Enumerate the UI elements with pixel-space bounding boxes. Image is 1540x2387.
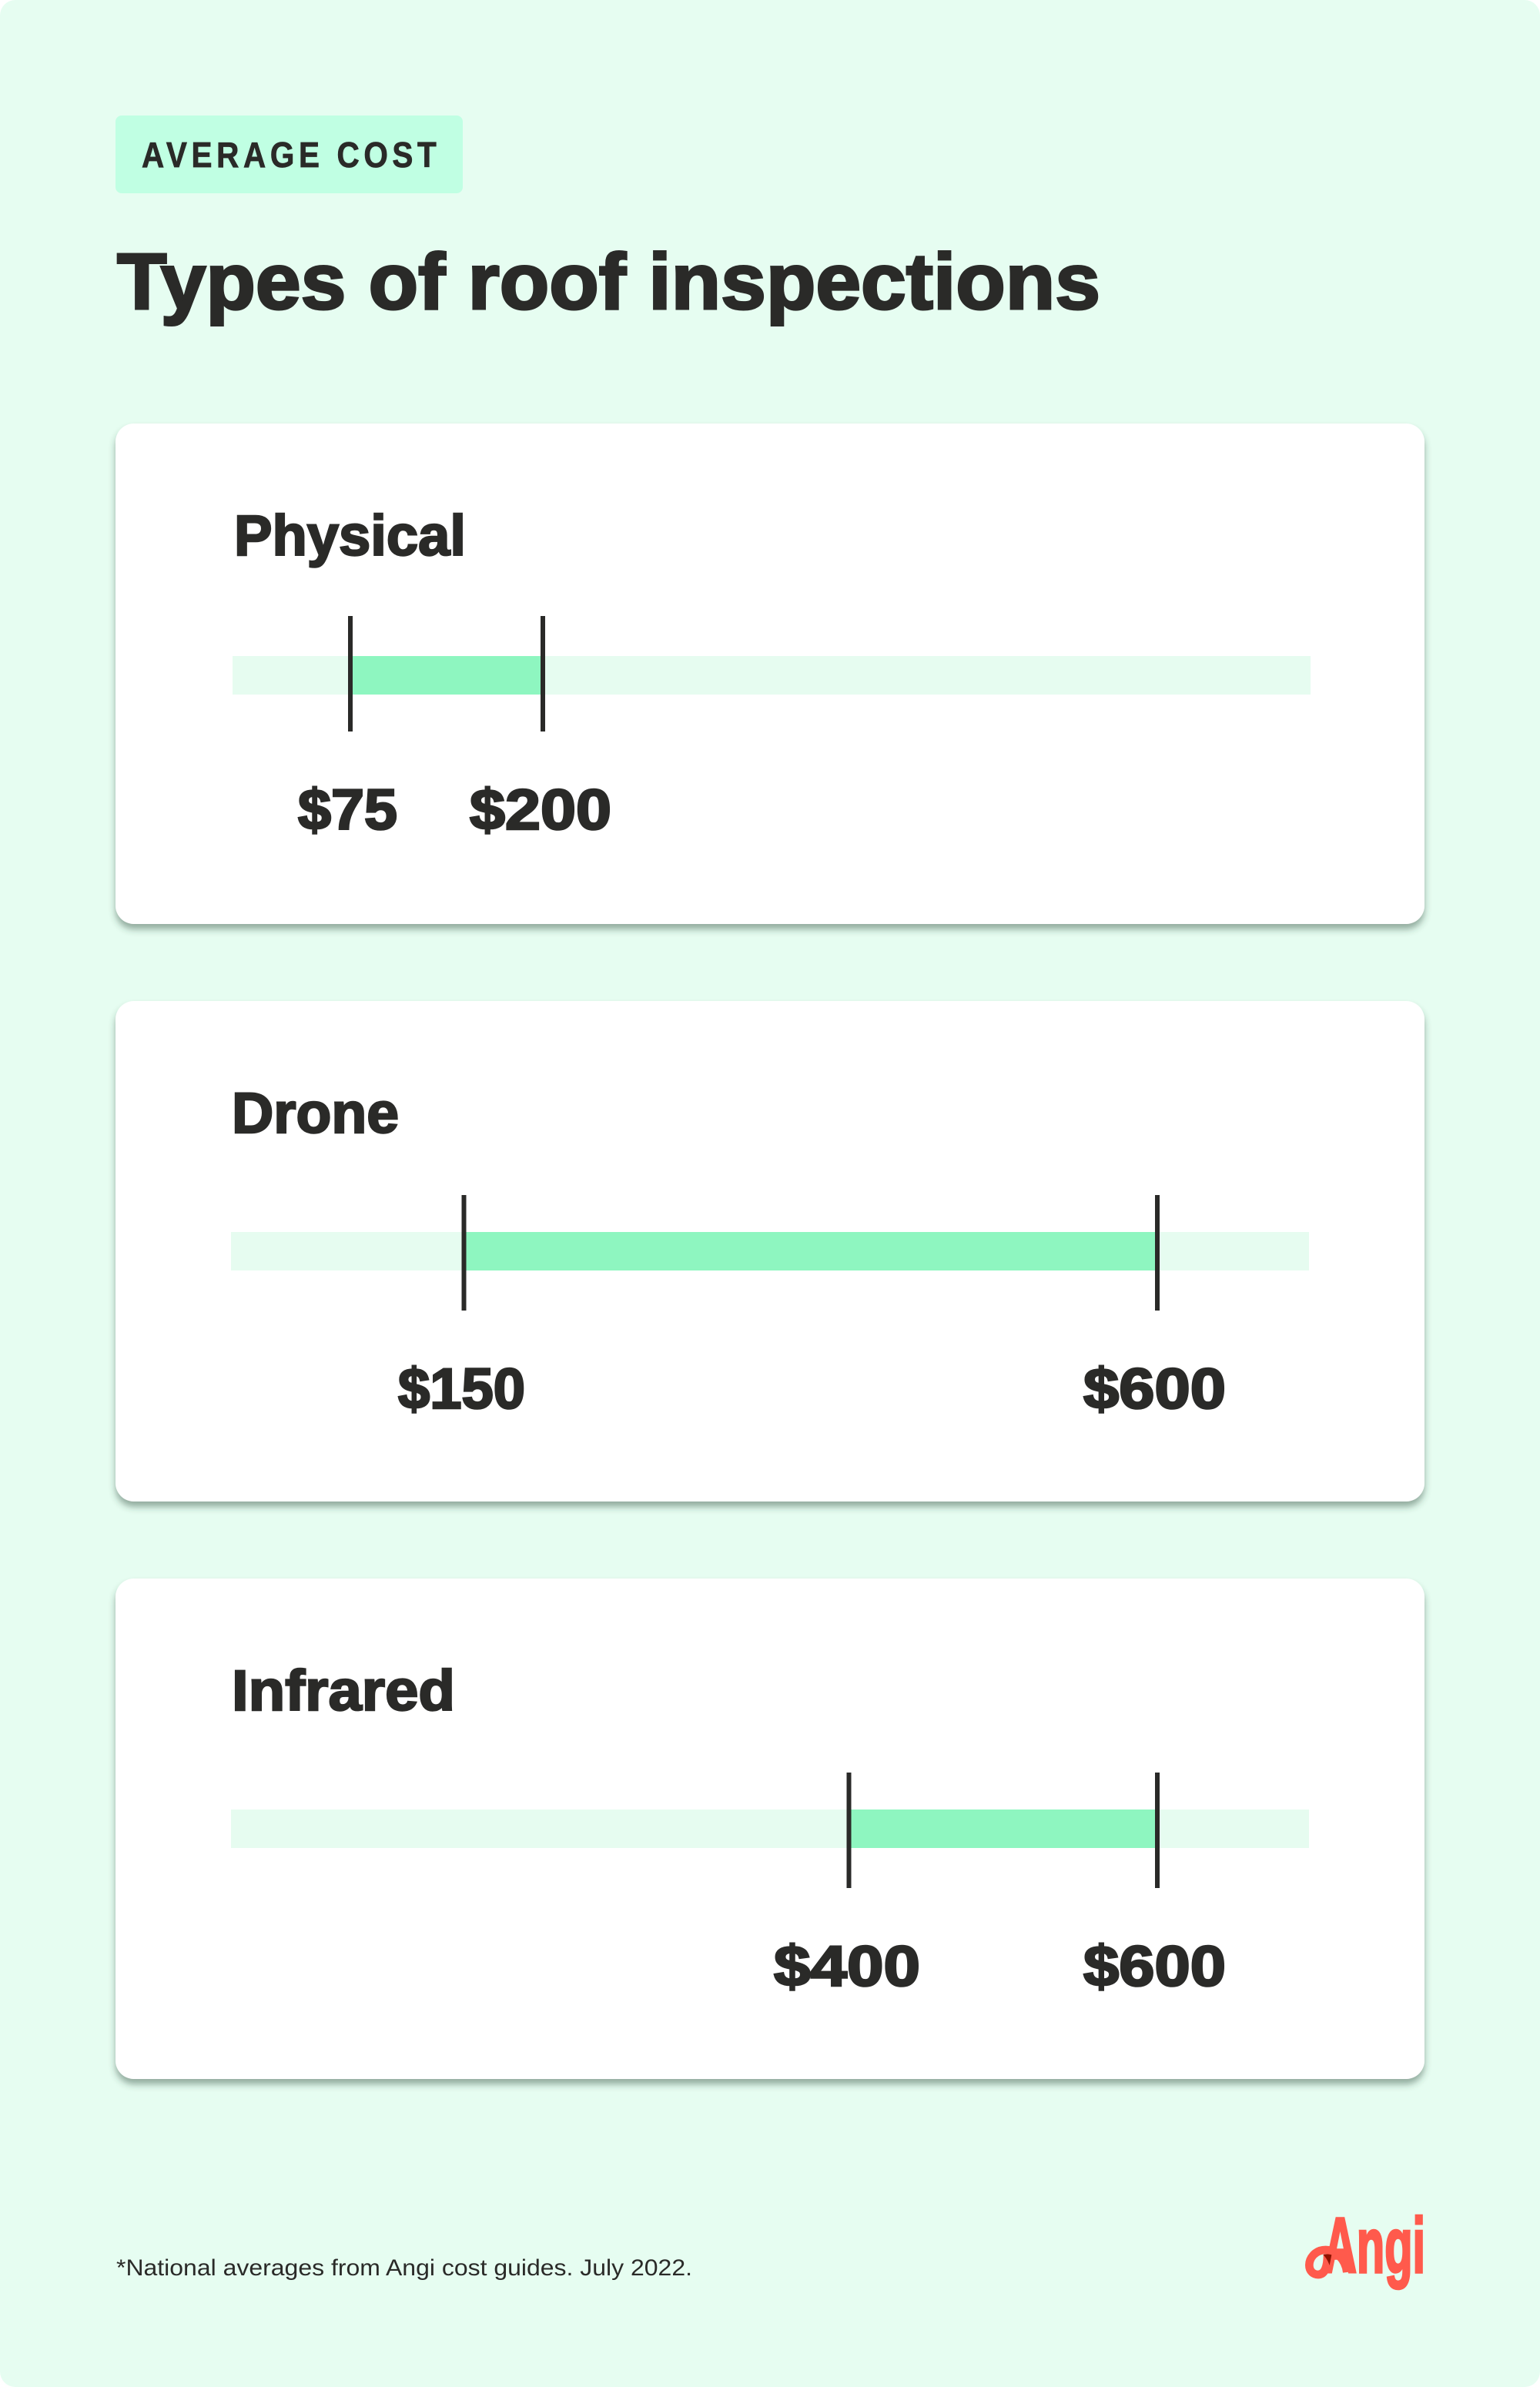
value: $150: $150 (398, 1357, 525, 1421)
value: $600: $600 (1083, 1357, 1226, 1421)
footnote: *National averages from Angi cost guides. July 2022. (116, 2255, 692, 2281)
value: $600: $600 (1083, 1934, 1226, 1998)
logo: Angi (1309, 2203, 1425, 2289)
range bar: infrared (231, 1773, 1309, 1888)
heading: infrared: Infrared (232, 1659, 455, 1722)
badge: average cost: AVERAGE COST (142, 136, 437, 176)
range bar: drone (231, 1195, 1309, 1311)
heading: physical: Physical (234, 504, 466, 567)
value: $200: $200 (470, 778, 611, 842)
panel: physical (116, 424, 1424, 924)
panel: drone (116, 1001, 1424, 1502)
panel: infrared (116, 1578, 1424, 2079)
logo: Angi: Angi (1324, 2203, 1425, 2289)
heading: drone: Drone (232, 1081, 399, 1145)
range bar: physical (233, 616, 1311, 732)
title: Types of roof inspections (117, 237, 1100, 326)
value: $75: $75 (298, 778, 397, 842)
value: $400: $400 (774, 1934, 920, 1998)
badge: average cost (116, 116, 463, 193)
